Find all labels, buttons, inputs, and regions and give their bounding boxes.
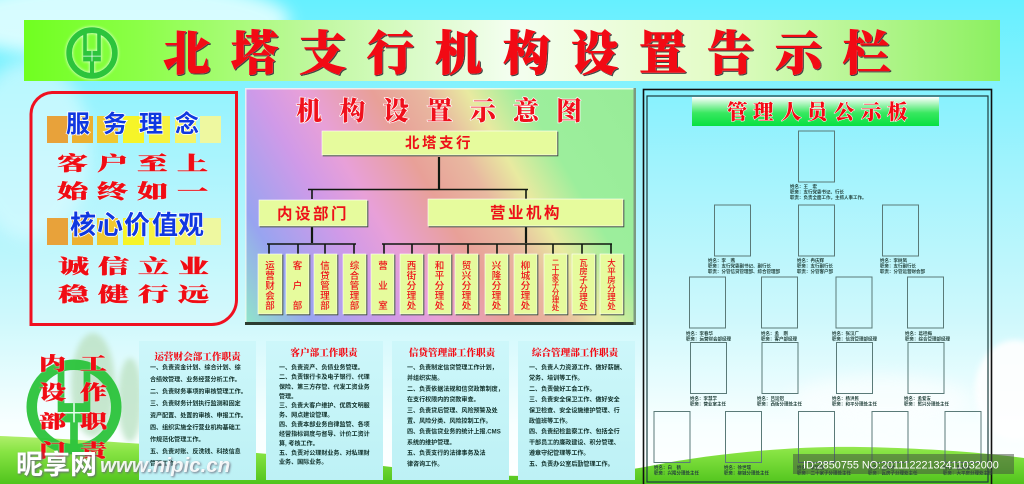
panel: credit management duties: 并组织实施。 [407,374,443,382]
panel: credit management duties: 信贷管理部工作职责 [409,347,497,359]
panel: operations finance duties: 合绩效管理、业务经营分析工作。 [150,376,241,384]
panel: customer department duties: 五、负责对公理财业务、对私理财 [279,449,370,457]
label: left column: 内 [39,353,66,374]
department and branch boxes: 二十家子分理处 [552,258,560,312]
slogan: consistent: 始终如一 [57,181,208,202]
panel: general management duties: 一、负责人力资源工作、做好薪酬、 [529,364,626,372]
panel: credit management duties: 一、负责制定信贷管理工作计划， [407,364,498,372]
department and branch boxes: 西街分理处 [407,261,417,312]
branch head photos and captions row one: 职务：贸兴分理处主任 [904,400,949,408]
panel: operations finance duties: 二、负责财务事项的审核管理工作。 [150,388,247,396]
panel: management staff board [644,90,993,484]
department and branch boxes: 信贷管理部 [320,260,330,312]
panel: organisation chart [245,88,636,325]
branch head photos and captions row two: 姓名：李国强 [797,464,824,471]
business units box: 营业机构 [490,204,562,222]
title banner [24,20,1000,81]
panel: general management duties: 三、负责安全保卫工作、做好安全 [529,396,620,404]
board heading [692,97,939,126]
deputy photos and captions: 姓名：李树凤 [880,257,907,264]
branch head photos and captions row two [654,412,993,476]
panel: customer department duties: 业务、国际业务。 [279,458,327,466]
panel: operations finance duties: 作规范化管理工作。 [150,436,204,444]
title text: 北塔支行机构设置告示栏 [163,29,890,81]
leader photo and caption [790,131,866,201]
panel: customer department duties: 一、负责资产、负债业务管理。 [279,364,364,372]
panel: general management duties: 综合管理部工作职责 [532,347,620,359]
department and branch boxes: 兴隆分理处 [492,261,502,312]
deputy photos and captions: 职责：分管信贷管理部、综合管理部 [708,268,780,275]
panel: customer department duties: 务、网点建设管理。 [279,411,333,419]
root box [322,131,557,155]
panel: operations finance duties: 资产配置、处置的审核、申报工作。 [150,412,247,420]
department manager photos and captions: 职务：运营财会部经理 [686,336,731,342]
heading: service philosophy: 服务理念 [66,110,199,138]
label: right column: 职 [80,411,110,432]
label: left column: 设 [39,382,67,404]
department and branch boxes: 大平房分理处 [607,258,616,311]
department manager photos and captions [686,277,950,342]
panel: customer department duties: 经营指标调度与督导、计价工资计 [279,430,370,438]
branch head photos and captions row two: 职务：瓦房子分理处主任 [868,470,918,476]
deputy photos and captions: 姓名：李 燕 [708,257,735,264]
panel: general management duties [518,341,635,480]
watermark: image id [793,454,1014,474]
panel: customer department duties: 二、负责银行卡及电子银行、代理 [279,373,370,381]
leader photo and caption: 姓名：王 宏 [790,183,817,190]
branch head photos and captions row two: 姓名：巢先莲 [943,464,970,471]
branch head photos and captions row one: 姓名：孟爱友 [904,395,931,402]
panel: credit management duties: 五、负责支行的法律事务及法 [407,449,486,457]
panel: credit management duties: 律咨询工作。 [407,460,443,468]
department and branch boxes: 和平分理处 [435,261,445,312]
colour blocks row one [47,116,221,143]
department manager photos and captions: 姓名：葛桂梅 [905,330,932,337]
panel: general management duties: 保卫检查、安全设施维护管理、行 [529,406,620,414]
branch head photos and captions row two: 职务：兴隆分理处主任 [654,470,699,476]
label: right column: 作 [80,382,108,404]
panel: operations finance duties: 一、负责资金计划、综合计划、综 [150,364,241,372]
internal departments box [259,200,367,226]
department manager photos and captions: 姓名：孟 刚 [761,330,788,337]
department manager photos and captions: 职务：信贷管理部经理 [832,336,877,342]
deputy photos and captions [708,205,925,275]
panel: service philosophy [31,92,236,325]
icon: bank logo [69,30,115,77]
internal departments box: 内设部门 [277,204,349,223]
panel: general management duties: 五、负责办公室后勤管理工作。 [529,460,614,468]
branch head photos and captions row one: 姓名：李慧学 [690,395,717,402]
chart title: 机构设置示意图 [296,96,582,126]
panel: operations finance duties: 运营财会部工作职责 [154,351,242,363]
panel: operations finance duties: 四、组织实施全行营业机构基础工 [150,424,241,432]
deputy photos and captions: 职务：支行党委副书记、副行长 [708,262,771,270]
department and branch boxes: 客户部 [293,260,303,312]
deputy photos and captions: 职务：支行副行长 [797,262,833,270]
branch head photos and captions row two: 姓名：王文才 [868,464,895,471]
branch head photos and captions row two: 职务：二十家子分理处主任 [797,470,851,476]
branch head photos and captions row one [690,342,949,408]
panel: operations finance duties: 五、负责对账、反洗钱、科技信息 [150,448,241,456]
panel: general management duties: 二、负责做好工会工作。 [529,385,596,393]
deputy photos and captions: 职责：分管客户部 [797,268,833,275]
label: left column [39,353,67,461]
department and branch boxes: 贸兴分理处 [462,260,472,312]
branch head photos and captions row one: 姓名：吕运铝 [757,395,784,402]
department and branch boxes [258,254,623,314]
deputy photos and captions: 职务：支行副行长 [880,262,916,270]
deputy photos and captions: 职责：分管运营财会部 [880,268,925,275]
slogan: customer first: 客户至上 [57,152,208,174]
panel: credit management duties: 三、负责贷后管理、风险预警及处 [407,406,498,414]
department manager photos and captions: 职务：综合管理部经理 [905,336,950,342]
watermark: image id: ID:2850755 NO:20111222132411032000 [803,460,999,472]
panel: operations finance duties: 三、负责财务计划执行监测和固定 [150,400,241,408]
panel: operations finance duties: 管理工作。 [150,460,180,468]
branch head photos and captions row one: 职务：西街分理处主任 [757,400,802,408]
panel: customer department duties: 客户部工作职责 [290,347,359,359]
department manager photos and captions: 姓名：李春华 [686,330,713,337]
branch head photos and captions row two: 姓名：徐世瑞 [724,464,751,471]
panel: general management duties: 干部员工的廉政建设、积分管理、 [529,438,620,446]
branch head photos and captions row one: 职务：和平分理处主任 [832,400,877,408]
panel: credit management duties [392,341,509,480]
watermark: site name [16,450,230,480]
panel: customer department duties: 算, 考核工作。 [279,440,319,448]
business units box [428,199,623,226]
label: right column: 工 [80,353,107,374]
colour blocks row two [47,218,221,245]
branch head photos and captions row two: 职务：柳城分理处主任 [724,470,769,476]
panel: operations finance duties [139,341,256,480]
department and branch boxes: 运营财会部 [265,261,275,312]
watermark: site name: www.nipic.cn [100,454,230,477]
board heading: 管理人员公示板 [727,100,908,124]
deputy photos and captions: 姓名：冉庆辉 [797,257,824,264]
label: left column: 门 [39,440,66,461]
slogan: integrity: 诚信立业 [58,256,209,277]
panel: credit management duties: 四、负责信贷业务的统计上报.CMS [407,428,501,436]
emblem: internal department duties [32,353,116,461]
panel: general management duties: 政值班等工作。 [529,417,571,425]
connector lines [267,157,612,254]
department and branch boxes: 营业室 [378,260,388,312]
panel: credit management duties: 系统的维护管理。 [407,438,455,446]
department manager photos and captions: 姓名：张汉广 [832,330,859,337]
label: right column: 责 [80,440,109,461]
panel: customer department duties: 三、负责大客户维护、优质文明服 [279,402,370,410]
leader photo and caption: 职责：负责全面工作，主抓人事工作。 [790,194,866,201]
department and branch boxes: 柳城分理处 [521,260,531,312]
panel: credit management duties: 置、风险分类、风险控制工作。 [407,417,492,425]
panel: customer department duties: 管理。 [279,392,297,400]
panel: general management duties: 党务、培训等工作。 [529,374,583,382]
root box: 北塔支行 [405,135,473,152]
branch head photos and captions row two: 姓名：白 鹤 [654,464,681,471]
branch head photos and captions row one: 职务：营业室主任 [690,400,726,408]
panel: credit management duties: 在支行权限内的贷款审查。 [407,396,480,404]
heading: core values: 核心价值观 [70,210,204,240]
branch head photos and captions row two: 职务：大平房分理处主任 [943,470,993,476]
branch head photos and captions row one: 姓名：杨洪民 [832,395,859,402]
department and branch boxes: 综合管理部 [350,260,360,312]
panel: credit management duties: 二、负责依据法规和信贷政策制度， [407,385,504,393]
department manager photos and captions: 职务：客户部经理 [761,336,797,342]
panel: customer department duties: 四、负责本部业务自律监管、各项 [279,420,370,428]
department and branch boxes: 瓦房子分理处 [579,258,588,311]
leader photo and caption: 职务：支行党委书记、行长 [790,188,844,196]
panel: general management duties: 四、负责纪检监察工作、包括全行 [529,428,620,436]
panel: general management duties: 遵章守纪管理等工作。 [529,449,589,457]
panel: customer department duties: 保险、第三方存管、代发工资业务 [279,383,370,391]
watermark: site name: 昵享网 [16,450,97,480]
icon: large bank logo [32,365,116,451]
label: right column [80,353,110,461]
slogan: steady: 稳健行远 [58,284,209,305]
panel: customer department duties [266,341,383,480]
label: left column: 部 [39,411,66,432]
